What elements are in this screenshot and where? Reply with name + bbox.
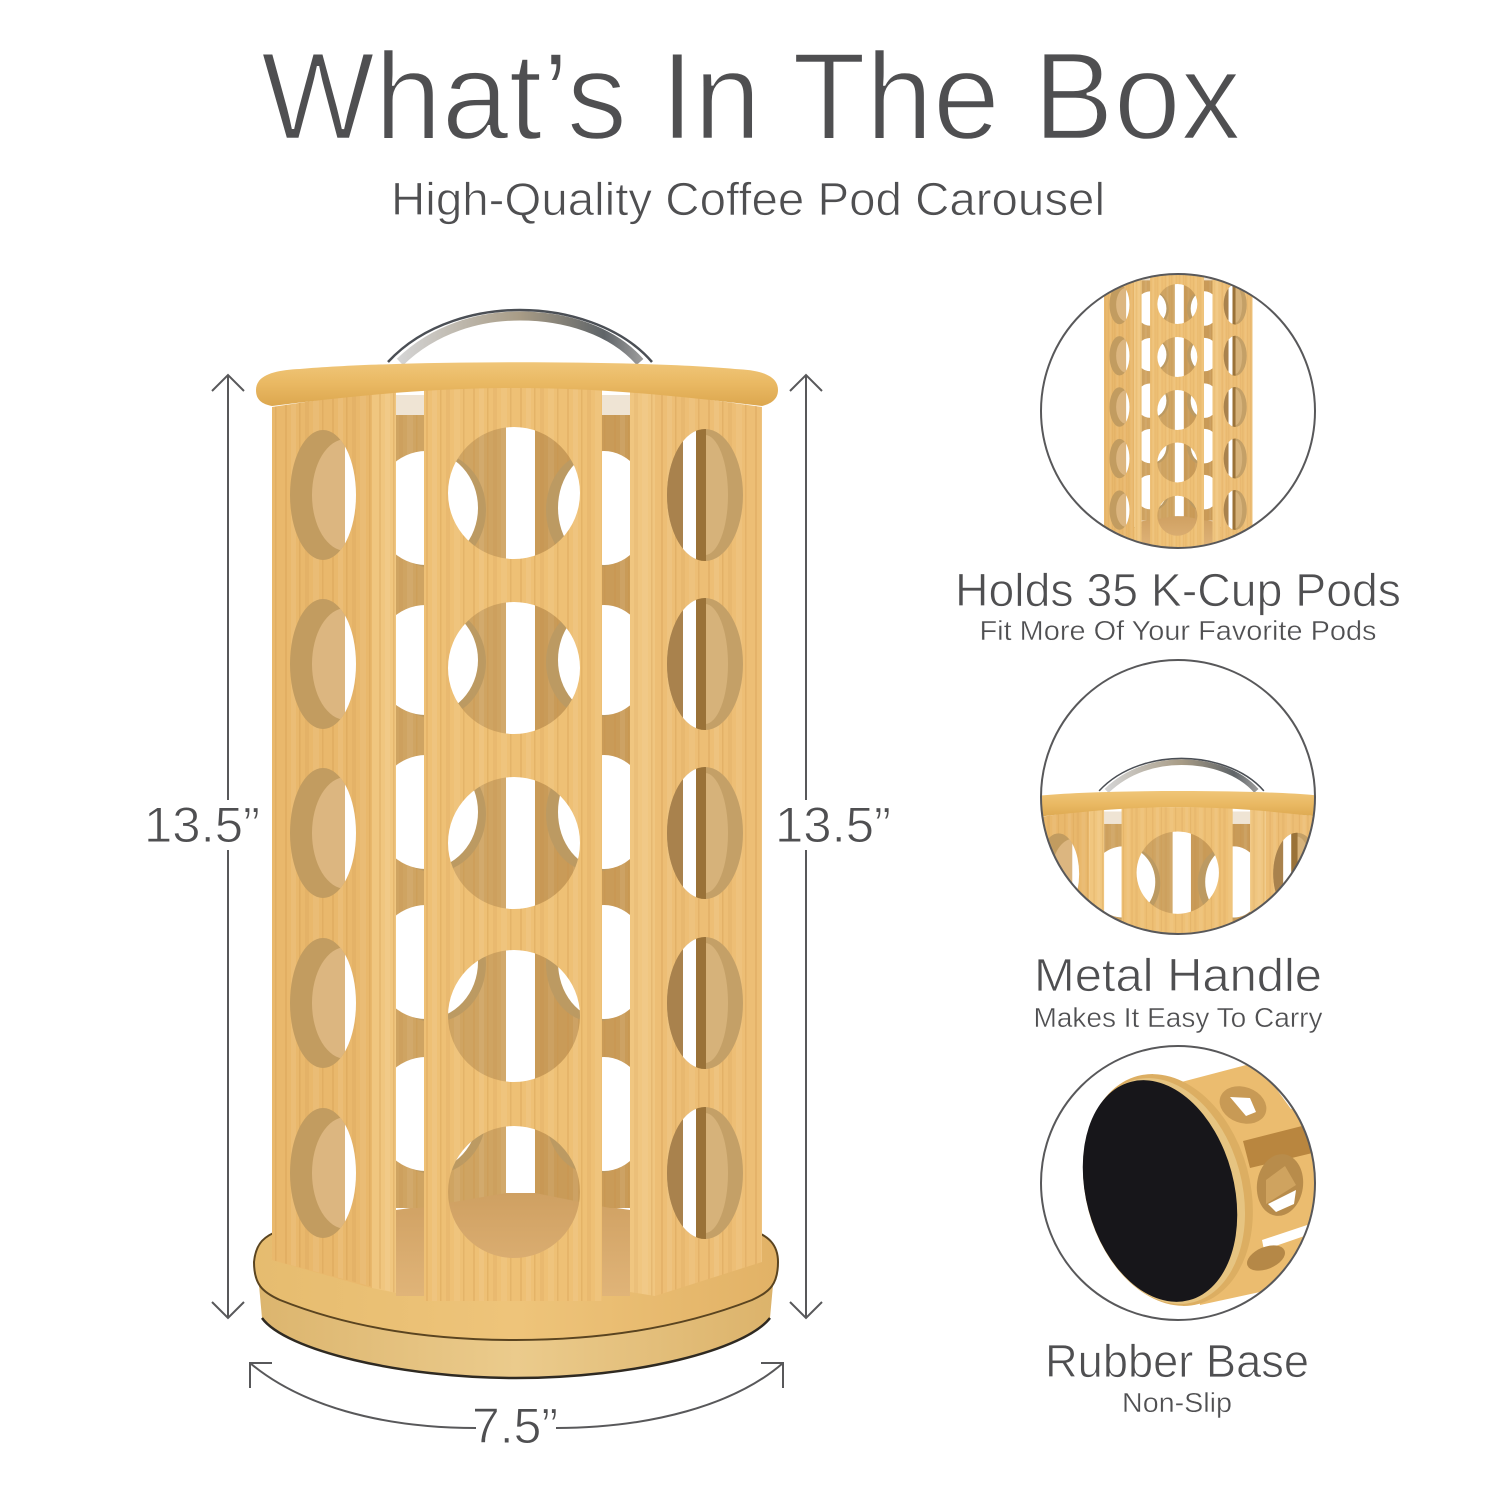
inset: metal handle	[1040, 659, 1316, 935]
caption: holds 35: Fit More Of Your Favorite Pods	[980, 615, 1376, 646]
heading: holds 35: Holds 35 K-Cup Pods	[955, 564, 1401, 616]
right height label: 13.5”	[775, 797, 891, 853]
main product photo: bamboo carousel	[254, 310, 778, 1378]
title: What’s In The Box	[261, 28, 1241, 166]
width arc arrow	[250, 1363, 783, 1428]
right height arrow	[790, 375, 822, 1318]
left height arrow	[212, 375, 244, 1318]
caption: rubber base: Non-Slip	[1122, 1387, 1232, 1418]
width label: 7.5”	[472, 1398, 558, 1454]
caption: metal handle: Makes It Easy To Carry	[1034, 1002, 1322, 1033]
rubber pad	[1082, 1080, 1238, 1302]
heading: metal handle: Metal Handle	[1034, 949, 1322, 1001]
inset: pods capacity	[1040, 273, 1316, 549]
heading: rubber base: Rubber Base	[1045, 1335, 1309, 1387]
inset: rubber base	[1041, 1046, 1330, 1325]
subtitle: High-Quality Coffee Pod Carousel	[391, 173, 1105, 225]
left height label: 13.5”	[144, 797, 260, 853]
